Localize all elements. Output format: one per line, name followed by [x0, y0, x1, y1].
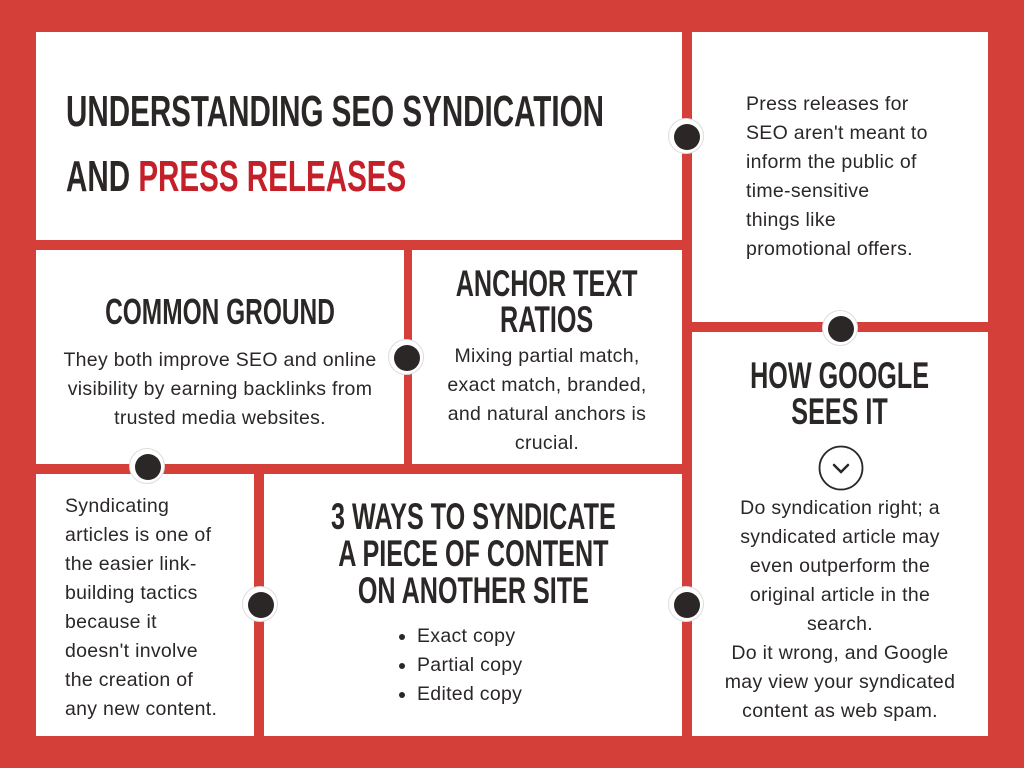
panel: syndicating articles: [36, 474, 254, 736]
heading: 3 ways: ON ANOTHER SITE: [358, 570, 589, 611]
heading: how google: [751, 355, 929, 432]
connector dot 6: [668, 586, 704, 622]
text: how google: even outperform the: [750, 555, 930, 577]
text: how google: Do syndication right; a: [740, 497, 940, 519]
list: ways: [399, 625, 522, 705]
list: ways: Partial copy: [417, 654, 522, 676]
text: how google: search.: [807, 613, 873, 635]
connector dot 4: [129, 448, 165, 484]
text: syndicating: any new content.: [65, 698, 217, 720]
panel: title: [36, 32, 682, 240]
text: anchor: exact match, branded,: [447, 374, 647, 396]
text: common ground: trusted media websites.: [114, 407, 326, 429]
text: press releases: inform the public of: [746, 151, 917, 173]
list: ways: Edited copy: [417, 683, 522, 705]
text: press releases: things like: [746, 209, 836, 231]
text: anchor: and natural anchors is: [448, 403, 646, 425]
text: anchor: [447, 345, 647, 454]
heading: common ground: COMMON GROUND: [105, 291, 335, 332]
text: press releases: Press releases for: [746, 93, 909, 115]
text: syndicating: articles is one of: [65, 524, 211, 546]
heading: 3 ways: [331, 496, 616, 611]
heading: 3 ways: A PIECE OF CONTENT: [338, 533, 609, 574]
text: how google: original article in the: [750, 584, 930, 606]
icon: chevron circle: [818, 446, 864, 490]
heading: how google: SEES IT: [792, 391, 888, 432]
panel: press releases note: [692, 32, 988, 322]
title: [66, 88, 604, 201]
connector dot 5: [242, 586, 278, 622]
text: syndicating: Syndicating: [65, 495, 169, 517]
panel: how google sees it: [692, 332, 988, 736]
heading: anchor text ratios: ANCHOR TEXT: [456, 263, 638, 304]
text: how google: Do it wrong, and Google: [731, 642, 949, 664]
text: press releases: [746, 93, 928, 260]
text: syndicating: the creation of: [65, 669, 193, 691]
text: how google: [725, 497, 955, 722]
text: how google: syndicated article may: [740, 526, 940, 548]
text: how google: may view your syndicated: [725, 671, 955, 693]
heading: how google: HOW GOOGLE: [751, 355, 929, 396]
text: common ground: [63, 349, 377, 429]
text: syndicating: [65, 495, 217, 720]
text: syndicating: building tactics: [65, 582, 198, 604]
text: how google: content as web spam.: [742, 700, 938, 722]
text: syndicating: because it: [65, 611, 157, 633]
connector dot 2: [822, 310, 858, 346]
text: press releases: promotional offers.: [746, 238, 913, 260]
heading: 3 ways: 3 WAYS TO SYNDICATE: [331, 496, 616, 537]
panel: anchor text ratios: [412, 250, 682, 464]
text: common ground: They both improve SEO and online: [63, 349, 377, 371]
text: press releases: time-sensitive: [746, 180, 869, 202]
title: UNDERSTANDING SEO SYNDICATION: [66, 88, 604, 136]
title: AND PRESS RELEASES: [66, 153, 406, 201]
list: ways: Exact copy: [417, 625, 515, 647]
panel: common ground: [36, 250, 404, 464]
text: syndicating: the easier link-: [65, 553, 197, 575]
connector dot 3: [388, 339, 424, 375]
heading: anchor text ratios: RATIOS: [500, 299, 594, 340]
text: anchor: crucial.: [515, 432, 579, 454]
heading: anchor text ratios: [456, 263, 638, 340]
panel: 3 ways: [264, 474, 682, 736]
text: common ground: visibility by earning backlinks from: [68, 378, 372, 400]
text: syndicating: doesn't involve: [65, 640, 198, 662]
connector dot 1: [668, 118, 704, 154]
text: press releases: SEO aren't meant to: [746, 122, 928, 144]
text: anchor: Mixing partial match,: [454, 345, 640, 367]
